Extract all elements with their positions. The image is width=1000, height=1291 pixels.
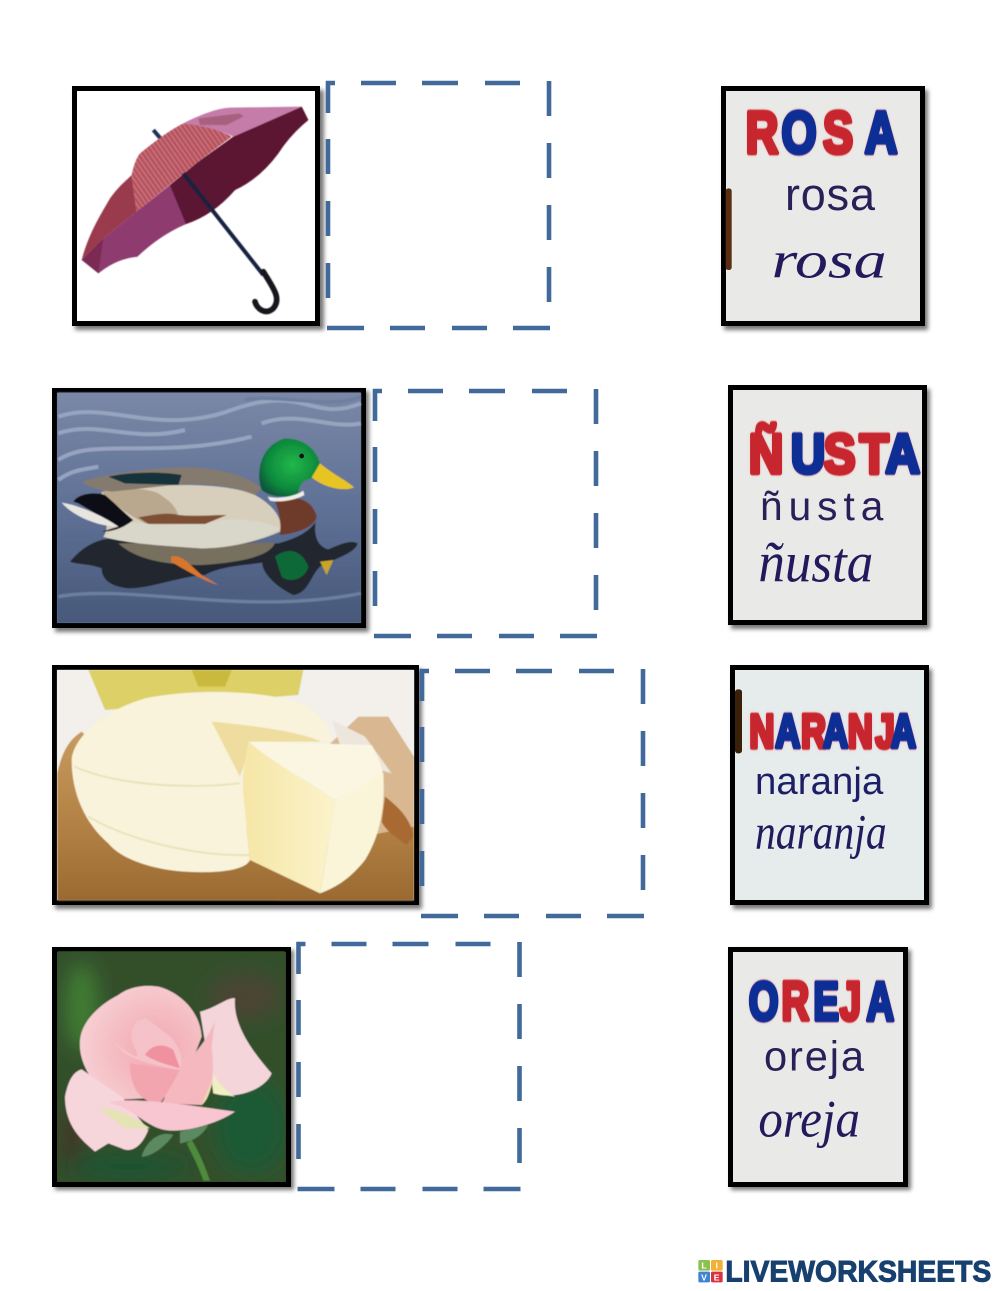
- panel: cheese picture: [54, 668, 422, 909]
- uppercase word: ÑUSTA: [749, 422, 920, 486]
- icon: mallard duck on water: [57, 392, 361, 623]
- word card: oreja: [730, 950, 911, 1190]
- icon: live tiles: V: [701, 1272, 707, 1282]
- panel: umbrella picture: [74, 88, 324, 330]
- print lowercase word: oreja: [764, 1033, 865, 1080]
- icon: pink rose: [57, 951, 288, 1182]
- dashed answer box: umbrella: [326, 81, 550, 328]
- panel: duck picture: [54, 390, 369, 632]
- print lowercase word: naranja: [755, 760, 884, 803]
- cursive word: ñusta: [758, 533, 873, 595]
- dashed answer box: duck: [373, 389, 597, 636]
- word card: ñusta: [730, 388, 930, 629]
- cursive word: oreja: [758, 1089, 860, 1149]
- panel: rose picture: [54, 950, 294, 1190]
- word card: rosa: [724, 88, 928, 330]
- icon: live tiles: E: [714, 1272, 720, 1282]
- logo wordmark: LIVEWORKSHEETS: [725, 1255, 991, 1288]
- icon: live tiles: I: [715, 1261, 718, 1271]
- icon: live tiles: [698, 1260, 723, 1282]
- uppercase word: ROSA: [746, 100, 897, 167]
- word card: naranja: [732, 668, 932, 909]
- print lowercase word: ñusta: [760, 483, 884, 529]
- dashed answer box: rose: [296, 942, 520, 1189]
- dashed answer box: cheese: [420, 669, 644, 916]
- uppercase word: NARANJA: [750, 704, 916, 758]
- cursive word: rosa: [772, 232, 887, 289]
- cursive word: naranja: [755, 803, 887, 859]
- logo: liveworksheets: [698, 1255, 991, 1288]
- icon: umbrella: [82, 107, 308, 311]
- icon: fresh cheese wheel with cut wedge: [57, 670, 414, 901]
- uppercase word: OREJA: [749, 971, 894, 1032]
- icon: live tiles: L: [701, 1261, 707, 1271]
- print lowercase word: rosa: [785, 169, 876, 220]
